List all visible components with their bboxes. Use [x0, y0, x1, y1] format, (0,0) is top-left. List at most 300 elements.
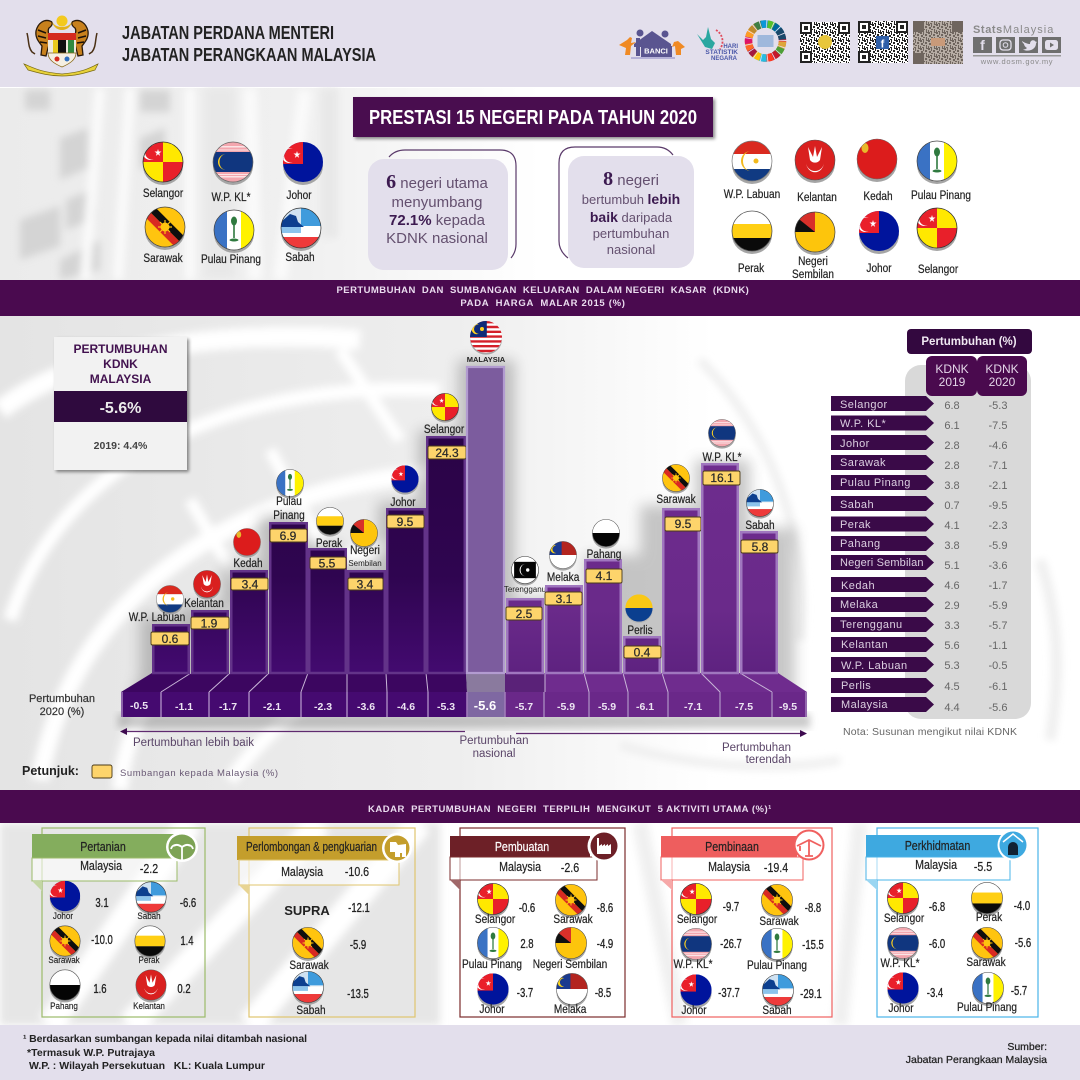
- Johor: [679, 974, 740, 1017]
- front growth cells: -7.5: [735, 701, 753, 713]
- bar: Sabah: 5.8: [752, 540, 769, 554]
- icon: Hari Statistik Negara logo: [697, 27, 738, 62]
- section band: KDNK chart heading: PERTUMBUHAN DAN SUMBANGAN KELUARAN DALAM NEGERI KASAR (KDNK): [336, 285, 750, 296]
- W.P. KL: W.P. KL*: [881, 957, 920, 970]
- panel: Pertanian: [32, 828, 205, 1017]
- arrow: lowest growth direction: [516, 730, 807, 766]
- callout: 8 negeri bertumbuh: 8 negeri: [603, 168, 659, 190]
- panel: Perkhidmatan: [866, 828, 1038, 1017]
- table rows: Perak: [840, 519, 871, 531]
- Sarawak: [45, 921, 113, 965]
- icon: palm tree: [166, 832, 198, 862]
- Sabah: [762, 974, 822, 1017]
- SUPRA: [284, 902, 370, 918]
- text: national growth: nasional: [473, 748, 515, 760]
- chart: floor shadow: [118, 714, 810, 728]
- table rows: -6.1: [989, 681, 1007, 693]
- table rows: -7.5: [989, 420, 1007, 432]
- Johor: [476, 973, 533, 1016]
- panel: Malaysia KDNK growth: PERTUMBUHAN: [74, 342, 168, 356]
- flag: Negeri Sembilan: Sembilan: [792, 268, 834, 281]
- section band: KDNK chart heading: PADA HARGA MALAR 2015 (%): [460, 298, 626, 309]
- Pulau Pinang: Pulau Pinang: [462, 958, 522, 971]
- flag: Sarawak: [139, 201, 191, 265]
- table header: KDNK 2019: KDNK: [935, 362, 969, 376]
- Johor: Johor: [479, 1003, 505, 1016]
- Pulau Pinang: Pulau Pinang: [957, 1001, 1017, 1014]
- bar: Pulau Pinang: 6.9: [280, 529, 297, 543]
- front growth cells: -5.9: [598, 701, 616, 713]
- Negeri Sembilan: -4.9: [597, 938, 613, 951]
- bar: W.P. KL: 16.1: [710, 471, 734, 485]
- table rows: -5.3: [989, 400, 1007, 412]
- Pahang: [50, 970, 107, 1011]
- callout: 6 negeri utama: KDNK nasional: [386, 230, 488, 247]
- flag: Perak: Perak: [738, 262, 765, 275]
- Sabah: Sabah: [137, 910, 161, 921]
- Johor: [886, 972, 943, 1015]
- Perak: -4.0: [1014, 900, 1030, 913]
- table rows: 3.8: [944, 480, 960, 492]
- Sabah: Sabah: [762, 1004, 792, 1017]
- bar: Melaka: 3.1: [556, 592, 573, 606]
- flag: Perak: [732, 211, 772, 275]
- panel: Malaysia KDNK growth: 2019: 4.4%: [94, 440, 148, 452]
- Pulau Pinang: Pulau Pinang: [747, 959, 807, 972]
- bar: Kelantan: 1.9: [201, 616, 218, 630]
- Sarawak: -8.8: [805, 902, 821, 915]
- panel header: [450, 836, 597, 890]
- bar: W.P. Labuan: [129, 585, 189, 673]
- Pulau Pinang: [747, 928, 824, 972]
- Perak: [135, 926, 194, 965]
- front growth cells: -5.3: [437, 701, 455, 713]
- icon: Malaysian coat of arms: [24, 16, 98, 76]
- bar: Perak: 5.5: [319, 556, 336, 570]
- front growth cells: -5.6: [474, 698, 496, 713]
- Sarawak: Sarawak: [289, 959, 329, 972]
- bar: Selangor: [424, 393, 466, 673]
- Negeri Sembilan: Negeri Sembilan: [533, 958, 607, 971]
- flag: Johor: [282, 142, 323, 202]
- bar: Negeri Sembilan: [348, 519, 385, 673]
- table rows: Pahang: [840, 538, 881, 550]
- flag: Negeri Sembilan: [792, 212, 835, 281]
- Melaka: [554, 973, 611, 1016]
- axis label: Pertumbuhan 2020: 2020 (%): [40, 706, 84, 718]
- table rows: 5.6: [944, 640, 960, 652]
- panel header: -2.6: [561, 861, 579, 875]
- front growth cells: -9.5: [779, 701, 797, 713]
- bar: Perlis: 0.4: [634, 646, 651, 660]
- flag: Selangor: [917, 208, 958, 276]
- table rows: Perlis: [841, 680, 871, 692]
- Melaka: -8.5: [595, 987, 611, 1000]
- flag: Sarawak: Sarawak: [143, 252, 183, 265]
- bar: Perlis: Perlis: [627, 624, 653, 637]
- Pahang: Pahang: [50, 1000, 78, 1011]
- panel header: [661, 836, 803, 890]
- flag: Johor: [858, 211, 899, 275]
- flag: Johor: Johor: [286, 189, 312, 202]
- icon: crane: [794, 830, 824, 860]
- table rows: W.P. KL*: [840, 418, 886, 430]
- source: [906, 1041, 1047, 1066]
- Kelantan: 0.2: [177, 983, 191, 996]
- flag: Sabah: Sabah: [285, 251, 315, 264]
- chart: bar shadows: [130, 360, 795, 700]
- flag: Selangor: Selangor: [143, 187, 183, 200]
- panel header: Pertanian: [80, 840, 126, 854]
- arrow: better growth direction: Pertumbuhan lebih baik: [133, 737, 254, 749]
- bar: W.P. KL: [702, 419, 742, 673]
- table rows: 6.1: [944, 420, 960, 432]
- background: chart section swirl texture: [0, 316, 1080, 790]
- bar: Pahang: Pahang: [587, 548, 621, 561]
- bar: Pahang: 4.1: [596, 569, 613, 583]
- heading: department names: [122, 23, 376, 65]
- table header: KDNK 2019: 2019: [939, 375, 966, 389]
- bar: Kelantan: Kelantan: [184, 597, 224, 610]
- table rows: -3.6: [989, 560, 1007, 572]
- panel header: Malaysia: [708, 860, 750, 874]
- bar: Pulau Pinang: Pulau: [276, 495, 302, 508]
- logo: StatsMalaysia with social icons: StatsMalaysia: [973, 24, 1054, 36]
- table rows: 2.8: [944, 460, 960, 472]
- front growth cells: -6.1: [636, 701, 654, 713]
- heading: department names: JABATAN PERDANA MENTERI: [122, 23, 334, 43]
- table rows: Melaka: [840, 599, 879, 611]
- header bar: [0, 0, 1080, 87]
- Johor: -3.7: [517, 987, 533, 1000]
- chart: growth and contribution stepped bars: [121, 321, 807, 717]
- arrow: lowest growth direction: Pertumbuhan: [722, 742, 791, 754]
- table rows: -5.9: [989, 540, 1007, 552]
- arrow: lowest growth direction: terendah: [746, 754, 791, 766]
- table header: Pertumbuhan: [907, 329, 1032, 354]
- icon: Banci Malaysia 2020 logo: BANCI: [644, 46, 668, 56]
- group: top contributing states flags: [139, 142, 323, 266]
- section band: KDNK chart heading: [0, 280, 1080, 316]
- bar: Sabah: [741, 489, 778, 673]
- flag: Pulau Pinang: [911, 141, 971, 202]
- Sarawak: Sarawak: [48, 954, 80, 965]
- panel header: Pembinaan: [705, 840, 759, 854]
- bar: Melaka: [545, 541, 582, 673]
- footnotes: [23, 1033, 307, 1072]
- icon: factory: [588, 830, 618, 862]
- axis label: Pertumbuhan 2020: Pertumbuhan: [29, 693, 95, 705]
- panel header: Malaysia: [80, 859, 122, 873]
- flag: Negeri Sembilan: Negeri: [798, 255, 828, 268]
- source: Jabatan Perangkaan Malaysia: [906, 1054, 1047, 1066]
- front growth cells: -0.5: [130, 700, 148, 712]
- W.P. KL: -26.7: [720, 938, 742, 951]
- panel header: Perlombongan & pengkuarian: [246, 840, 377, 854]
- Sarawak: -5.6: [1015, 937, 1031, 950]
- bar: Terengganu: Terengganu: [504, 585, 546, 594]
- title banner: [353, 97, 713, 137]
- Johor: -3.4: [927, 987, 943, 1000]
- background: blurred building texture (top section): [0, 88, 1080, 280]
- footer bar: [0, 1025, 1080, 1080]
- W.P. KL: [674, 928, 742, 971]
- Selangor: Selangor: [677, 913, 717, 926]
- background: activity section stripes: [0, 823, 860, 1025]
- bar: Kelantan: [184, 570, 229, 673]
- heading: department names: JABATAN PERANGKAAN MALAYSIA: [122, 45, 376, 65]
- table rows: 4.4: [944, 702, 960, 714]
- panel header: Malaysia: [499, 860, 541, 874]
- table note: Nota: Susunan mengikut nilai KDNK: [843, 726, 1017, 738]
- 3D floor: [121, 673, 807, 692]
- Selangor: -6.8: [929, 901, 945, 914]
- Sarawak: [551, 880, 613, 926]
- SUPRA: -12.1: [348, 902, 370, 915]
- callout: 6 negeri utama: 72.1% kepada: [389, 212, 486, 229]
- front growth cells: -1.7: [219, 701, 237, 713]
- Kelantan: [133, 970, 191, 1011]
- bar: Terengganu: [504, 556, 546, 673]
- Selangor: -0.6: [519, 902, 535, 915]
- bar: Kedah: 3.4: [242, 578, 259, 592]
- bar: Malaysia: [467, 321, 506, 673]
- icon: Hari Statistik Negara logo: NEGARA: [711, 56, 738, 62]
- bar: W.P. Labuan: 0.6: [162, 632, 179, 646]
- flag: Kedah: Kedah: [863, 190, 893, 203]
- arrow: better growth direction: [120, 728, 465, 749]
- bar: Pahang: [585, 519, 622, 673]
- title banner: PRESTASI 15 NEGERI PADA TAHUN 2020: [369, 107, 697, 129]
- Sarawak: Sarawak: [966, 956, 1006, 969]
- Sarawak: [966, 923, 1031, 969]
- table header: Pertumbuhan: Pertumbuhan (%): [921, 336, 1017, 348]
- panel header: [866, 835, 1010, 890]
- table rows: Terengganu: [840, 619, 903, 631]
- bar: Kedah: [231, 528, 268, 673]
- source: Sumber:: [1007, 1041, 1047, 1053]
- bar: Sabah: Sabah: [745, 519, 775, 532]
- front growth cells: -5.9: [557, 701, 575, 713]
- Melaka: Melaka: [554, 1003, 587, 1016]
- panel: Perlombongan & pengkuarian: [237, 828, 415, 1017]
- footnotes: *Termasuk W.P. Putrajaya: [27, 1047, 155, 1059]
- callout: 6 negeri utama: 6 negeri utama: [386, 171, 489, 193]
- logo: StatsMalaysia with social icons: [973, 24, 1061, 66]
- front growth cells: -4.6: [397, 701, 415, 713]
- Pulau Pinang: 2.8: [520, 938, 534, 951]
- flag: W.P. KL: [212, 142, 253, 204]
- panel header: Malaysia: [915, 858, 957, 872]
- icon: QR code 3: [913, 21, 963, 64]
- Johor: Johor: [53, 910, 73, 921]
- icon: QR code 2 Facebook: f: [881, 38, 885, 50]
- Perak: Perak: [139, 954, 160, 965]
- Pulau Pinang: -5.7: [1011, 985, 1027, 998]
- Perak: Perak: [976, 911, 1003, 924]
- table header: KDNK 2020: 2020: [989, 375, 1016, 389]
- flag: Johor: Johor: [866, 262, 892, 275]
- table header: KDNK 2020: [977, 356, 1027, 396]
- Selangor: [884, 882, 945, 925]
- table rows: 3.8: [944, 540, 960, 552]
- panel header: [32, 834, 177, 891]
- bar: Malaysia: MALAYSIA: [467, 355, 506, 364]
- icon: Banci Malaysia 2020 logo: [619, 30, 685, 59]
- table rows: 6.8: [944, 400, 960, 412]
- front growth cells: -1.1: [175, 701, 193, 713]
- Sarawak: -5.9: [350, 939, 366, 952]
- Selangor: Selangor: [884, 912, 924, 925]
- flag: Kelantan: Kelantan: [797, 191, 837, 204]
- callout: 8 negeri bertumbuh: nasional: [607, 242, 655, 257]
- table rows: 4.1: [944, 520, 960, 532]
- Pulau Pinang: [957, 972, 1027, 1014]
- Sabah: Sabah: [296, 1004, 326, 1017]
- table rows: [831, 396, 1007, 714]
- bar: Sarawak: 9.5: [675, 517, 692, 531]
- table: growth by state: [831, 329, 1032, 738]
- panel header: -19.4: [764, 861, 789, 875]
- callout: 8 negeri bertumbuh: pertumbuhan: [593, 226, 669, 241]
- bar: Johor: 9.5: [397, 515, 414, 529]
- table rows: Selangor: [840, 399, 888, 411]
- table rows: Pulau Pinang: [840, 477, 911, 489]
- logo: StatsMalaysia with social icons: f: [980, 37, 985, 53]
- bar: Negeri Sembilan: 3.4: [357, 578, 374, 592]
- footnotes: W.P. : Wilayah Persekutuan KL: Kuala Lumpur: [29, 1060, 265, 1072]
- table rows: -5.6: [989, 702, 1007, 714]
- table rows: -5.7: [989, 620, 1007, 632]
- panel: Pembuatan: [450, 828, 625, 1017]
- table rows: 5.3: [944, 660, 960, 672]
- bar: Negeri Sembilan: Sembilan: [348, 559, 382, 568]
- bar: Perak: Perak: [316, 537, 343, 550]
- legend: yellow contribution swatch: Sumbangan kepada Malaysia (%): [120, 768, 278, 779]
- panel header: -5.5: [974, 860, 992, 874]
- table rows: 5.1: [944, 560, 960, 572]
- table rows: -2.3: [989, 520, 1007, 532]
- section band: activity heading: KADAR PERTUMBUHAN NEGERI TERPILIH MENGIKUT 5 AKTIVITI UTAMA (%)¹: [368, 804, 772, 815]
- flag: W.P. Labuan: W.P. Labuan: [724, 188, 780, 201]
- icon: Hari Statistik Negara logo: STATISTIK: [705, 49, 738, 56]
- icon: SDG colour wheel: [741, 17, 790, 65]
- bar: Terengganu: 2.5: [516, 607, 533, 621]
- table rows: -9.5: [989, 500, 1007, 512]
- legend: yellow contribution swatch: Petunjuk:: [22, 764, 79, 778]
- panel header: [237, 836, 399, 895]
- table rows: Sarawak: [840, 457, 886, 469]
- panel header: -2.2: [140, 862, 158, 876]
- flag: Pulau Pinang: [201, 210, 261, 266]
- front growth cells: [121, 692, 807, 717]
- Sarawak: Sarawak: [759, 915, 799, 928]
- table header: KDNK 2019: [926, 356, 977, 396]
- table rows: Kelantan: [841, 639, 888, 651]
- Pahang: 1.6: [93, 983, 107, 996]
- table rows: 3.3: [944, 620, 960, 632]
- bar: Selangor: 24.3: [435, 446, 459, 460]
- table rows: Malaysia: [841, 699, 888, 711]
- table rows: -4.6: [989, 440, 1007, 452]
- table background panel: [905, 365, 1031, 719]
- Perak: 1.4: [180, 935, 194, 948]
- axis label: Pertumbuhan 2020: [29, 693, 95, 718]
- callout: 6 negeri utama: menyumbang: [392, 194, 482, 211]
- bar: Negeri Sembilan: Negeri: [350, 544, 380, 557]
- table rows: 0.7: [944, 500, 960, 512]
- panel: Malaysia KDNK growth: [54, 337, 187, 470]
- bar: W.P. Labuan: W.P. Labuan: [129, 611, 185, 624]
- legend: yellow contribution swatch: [22, 764, 278, 779]
- flag: W.P. KL: W.P. KL*: [212, 191, 251, 204]
- Sabah: [292, 971, 369, 1017]
- Pulau Pinang: [462, 927, 534, 971]
- flag: Selangor: Selangor: [918, 263, 958, 276]
- front growth cells: -2.3: [314, 701, 332, 713]
- section band: activity heading: [0, 790, 1080, 823]
- table rows: -5.9: [989, 600, 1007, 612]
- table rows: -7.1: [989, 460, 1007, 472]
- Sabah: [136, 882, 196, 921]
- bar: Selangor: Selangor: [424, 423, 464, 436]
- text: national growth: [459, 735, 529, 760]
- Johor: [49, 881, 109, 921]
- bar: W.P. KL: W.P. KL*: [703, 451, 742, 464]
- icon: QR code 1: [800, 22, 850, 63]
- Sabah: -6.6: [180, 897, 196, 910]
- Pulau Pinang: -15.5: [802, 939, 824, 952]
- Kelantan: Kelantan: [133, 1000, 165, 1011]
- panel header: Pembuatan: [495, 840, 549, 854]
- Sabah: -29.1: [800, 988, 822, 1001]
- bar: Johor: [387, 465, 425, 673]
- table rows: Negeri Sembilan: [840, 557, 924, 569]
- panel header: -10.6: [345, 865, 369, 879]
- callout: 8 negeri bertumbuh: baik daripada: [590, 209, 673, 225]
- table rows: 2.8: [944, 440, 960, 452]
- flag: Kelantan: [795, 140, 837, 204]
- group: above national growth states flags: [724, 139, 971, 281]
- panel header: Malaysia: [281, 865, 323, 879]
- SUPRA: SUPRA: [284, 903, 330, 918]
- icon: service building: [998, 830, 1028, 860]
- bar: Kedah: Kedah: [233, 557, 263, 570]
- table rows: Kedah: [841, 580, 875, 592]
- icon: QR code 2 Facebook: [858, 21, 908, 63]
- bar: Pulau Pinang: [270, 469, 307, 673]
- Sarawak: [757, 880, 821, 928]
- W.P. KL: W.P. KL*: [674, 958, 713, 971]
- table rows: -1.7: [989, 580, 1007, 592]
- table header: KDNK 2020: KDNK: [985, 362, 1019, 376]
- Johor: Johor: [681, 1004, 707, 1017]
- Sarawak: [288, 923, 366, 972]
- icon: Hari Statistik Negara logo: HARI: [723, 44, 738, 50]
- table rows: 4.6: [944, 580, 960, 592]
- table rows: Sabah: [840, 499, 874, 511]
- bar: Melaka: Melaka: [547, 571, 580, 584]
- table rows: -1.1: [989, 640, 1007, 652]
- Sabah: -13.5: [347, 988, 369, 1001]
- front growth cells: -2.1: [263, 701, 281, 713]
- Selangor: Selangor: [475, 913, 515, 926]
- icon: mining: [382, 833, 412, 863]
- bar: Perlis: [624, 594, 661, 673]
- text: national growth: Pertumbuhan: [459, 735, 529, 747]
- flag: W.P. Labuan: [724, 141, 780, 201]
- W.P. KL: [881, 927, 945, 970]
